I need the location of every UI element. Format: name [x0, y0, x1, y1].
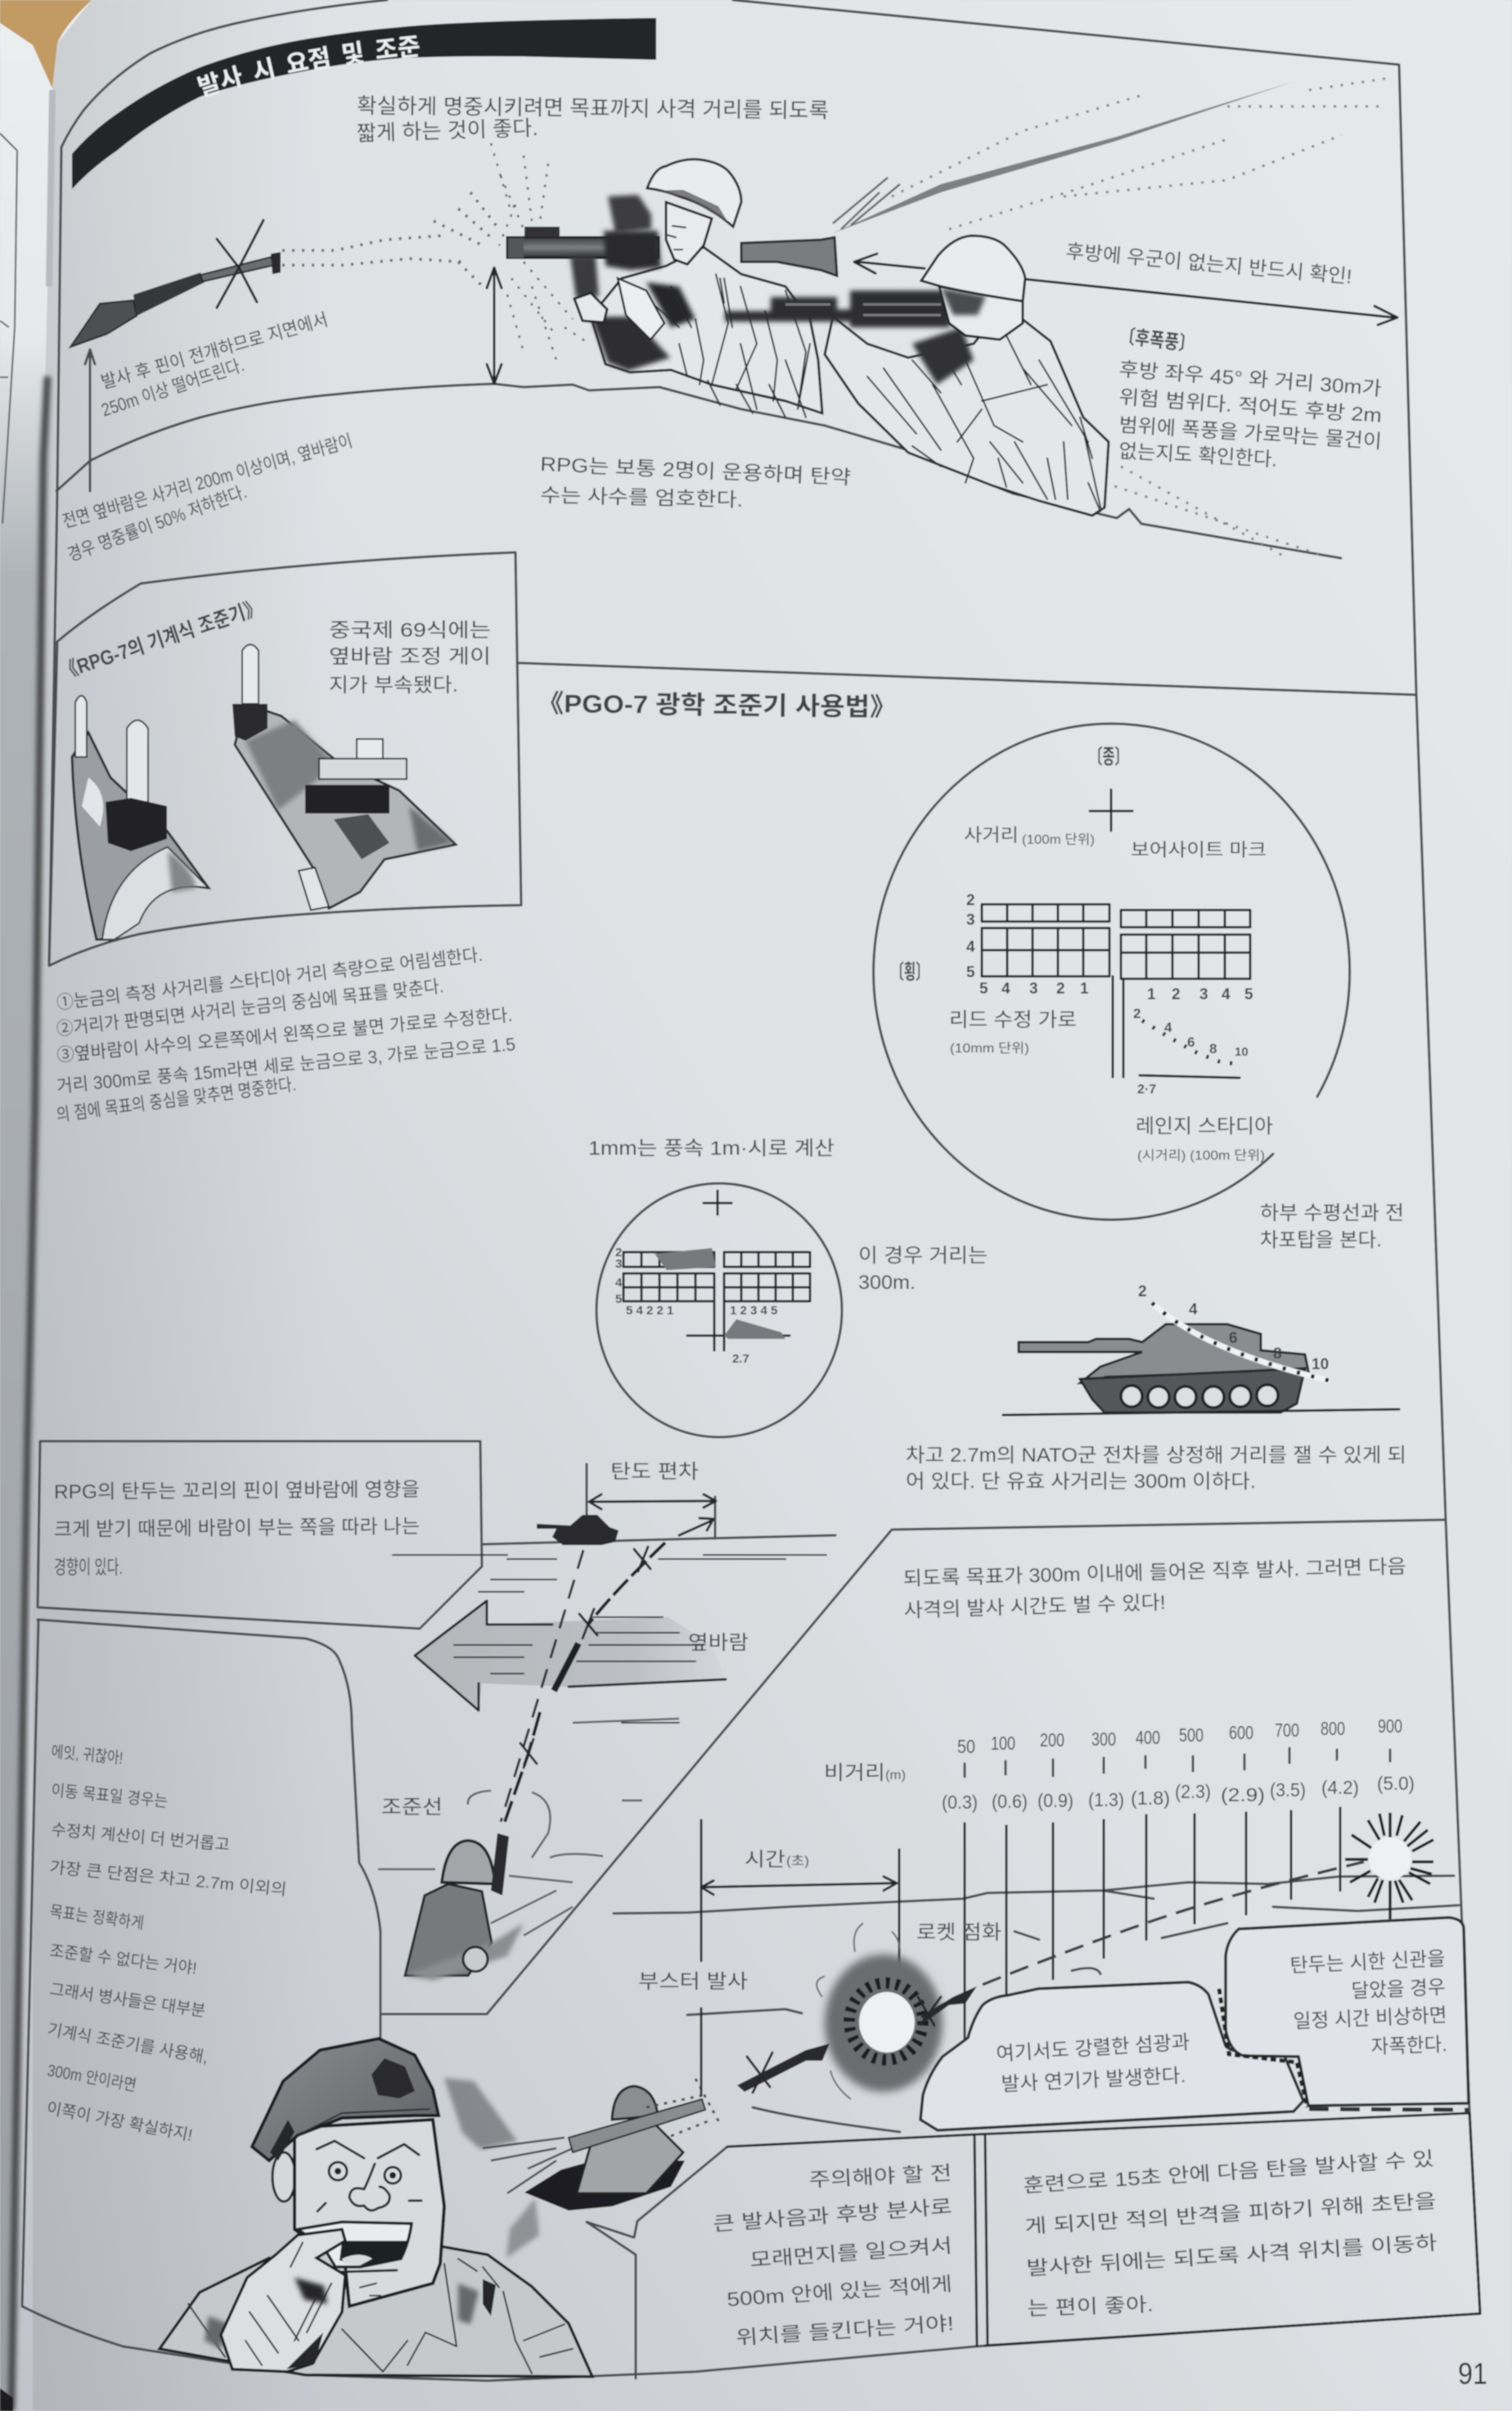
callout: flash at booster: 발사 연기가 발생한다.: [1001, 2065, 1186, 2096]
rear tube: [741, 237, 837, 276]
illustration: tank with stadia: 2: [1138, 1283, 1147, 1300]
chart: ballistic deviation scene: [378, 1461, 835, 1981]
launcher forward section: [507, 237, 659, 258]
callout: time fuze: 달았을 경우: [1351, 1976, 1446, 2003]
beret: [252, 2039, 439, 2161]
ground line of top scene: [56, 384, 1341, 558]
text: sighting steps: ②거리가 판명되면 사거리 눈금의 중심에 목표를 맞춘다.: [56, 976, 445, 1039]
flight times: (0.6): [992, 1791, 1028, 1812]
distance labels: 300: [1091, 1728, 1116, 1750]
label: boresight mark: 보어사이트 마크: [1131, 840, 1267, 860]
left page shadow on the sheet: [33, 0, 327, 2411]
callout: time fuze: 탄두는 시한 신관을: [1289, 1948, 1446, 1977]
callout: time fuze: 자폭한다.: [1370, 2034, 1447, 2058]
reticle numbers: 5: [1244, 986, 1253, 1003]
text: Type 69 note: 지가 부속됐다.: [329, 674, 458, 696]
icon: target tank: [537, 1515, 619, 1545]
reload rocket: [725, 291, 950, 327]
terrain lines: [614, 1876, 1459, 2132]
illustration: sergeant in beret: [160, 2039, 592, 2377]
frame: dispersion scene and distance scene border: [380, 1520, 1446, 2014]
panel: crosswind note: [38, 1441, 482, 1629]
flight times: (3.5): [1270, 1779, 1306, 1800]
panel: training note: 게 되지만 적의 반격을 피하기 위해 초탄을: [1024, 2190, 1437, 2238]
text: sighting steps: ①눈금의 측정 사거리를 스타디아 거리 측량으로 어림셈한다.: [56, 944, 484, 1013]
text: sergeant's explanation: 에잇, 귀찮아!: [51, 1742, 124, 1768]
text: fins open, drop from ground: [99, 309, 331, 421]
text: 2.7m tank assumption: 차고 2.7m의 NATO군 전차를 상정해 거리를 잴 수 있게 되: [906, 1444, 1406, 1467]
label: range stadia: 레인지 스타디아: [1136, 1115, 1273, 1138]
reticle numbers: 4: [966, 939, 975, 956]
label: range: (100m 단위): [1022, 832, 1095, 847]
label: range: 사거리: [964, 825, 1019, 845]
panel: training note: 는 편이 좋아.: [1027, 2294, 1154, 2320]
reticle numbers: 2: [966, 892, 975, 909]
chart: small reticle with tank: 5 4 2 2 1: [626, 1304, 673, 1318]
target tank in reticle: [655, 1248, 785, 1339]
callout: time fuze: [1219, 1918, 1469, 2110]
label: time: 시간: [745, 1849, 785, 1871]
text: distance is 300m: 이 경우 거리는: [858, 1245, 988, 1267]
label: elevation: 〔종〕: [1089, 746, 1128, 768]
back-blast lines: [833, 78, 1391, 557]
text: fins open, drop from ground: 250m 이상 떨어뜨린다.: [99, 354, 246, 421]
illustration: tank with stadia: 10: [1312, 1356, 1329, 1373]
text: sergeant's explanation: 이동 목표일 경우는: [51, 1781, 169, 1811]
distance labels: 600: [1229, 1722, 1253, 1743]
flight times: (0.9): [1037, 1790, 1073, 1811]
text: look at horizon and turret: 하부 수평선과 전: [1260, 1202, 1404, 1224]
distance ticks: [965, 1748, 1390, 1777]
label: range: [964, 825, 1095, 847]
icon: rocket igniting: [918, 1986, 977, 2026]
speech bubble: caution: 주의해야 할 전: [808, 2162, 952, 2192]
flight times: (5.0): [1377, 1773, 1415, 1794]
panel: crosswind note: RPG의 탄두는 꼬리의 핀이 옆바람에 영향을: [54, 1479, 420, 1503]
illustration: firing soldier with RPG-7: [507, 160, 837, 417]
speech bubble: caution: 모래먼지를 일으켜서: [749, 2235, 953, 2272]
aiming line: [501, 1550, 583, 1822]
label: lead correction: (10mm 단위): [950, 1041, 1029, 1056]
text: sergeant's explanation: [45, 1742, 287, 2145]
icon: rocket ignition blast: [817, 1923, 943, 2099]
text: back-blast note: 위험 범위다. 적어도 후방 2m: [1118, 386, 1383, 427]
helmet: [921, 236, 1025, 301]
chart: small reticle with tank: 3: [615, 1257, 622, 1271]
reticle numbers: 4: [1001, 980, 1010, 998]
text: sergeant's explanation: 가장 큰 단점은 차고 2.7m 이외의: [49, 1858, 287, 1900]
reticle numbers: 3: [1029, 980, 1038, 998]
label: ballistic deviation: 탄도 편차: [610, 1461, 699, 1483]
panel: training note: 발사한 뒤에는 되도록 사격 위치를 이동하: [1026, 2232, 1438, 2280]
moustache stubs: [317, 2201, 421, 2211]
text: fire right after 300m: 사격의 발사 시간도 벌 수 있다!: [903, 1592, 1166, 1622]
chart: large PGO-7 reticle: [874, 723, 1350, 1219]
arrow: crosswind direction: [415, 1601, 726, 1710]
text: sergeant's explanation: 300m 안이라면: [46, 2061, 137, 2095]
text: crosswind accuracy note: [61, 430, 354, 566]
icon: left rear sight view: [72, 696, 209, 940]
distance labels: 50: [957, 1736, 975, 1757]
heading: firing essentials: 발사 시 요점 및 조준: [196, 34, 421, 97]
text: wind speed calc: 1mm는 풍속 1m·시로 계산: [588, 1138, 835, 1160]
text: check rear: 후방에 우군이 없는지 반드시 확인!: [1064, 241, 1352, 288]
panel: crosswind note: 크게 받기 때문에 바람이 부는 쪽을 따라 나는: [54, 1516, 420, 1541]
label: time: (초): [786, 1854, 809, 1868]
panel: training note: 훈련으로 15초 안에 다음 탄을 발사할 수 있: [1023, 2148, 1434, 2197]
text: back-blast note: [1118, 325, 1383, 471]
illustration: tank with stadia: 4: [1189, 1301, 1198, 1318]
distance lines: [965, 1808, 1340, 2039]
label: range: [824, 1762, 906, 1784]
reticle numbers: 4: [1222, 986, 1231, 1003]
speech bubble: caution: 위치를 들킨다는 거야!: [736, 2313, 955, 2350]
arrow: check rear is clear: [854, 254, 1397, 325]
text: back-blast note: 〔후폭풍〕: [1118, 325, 1196, 356]
label: line of sight: 조준선: [381, 1796, 443, 1818]
label: rocket ignition: 로켓 점화: [916, 1922, 1001, 1944]
distance labels: 700: [1275, 1719, 1299, 1741]
helmet: [647, 160, 741, 227]
flight times: [942, 1773, 1415, 1813]
heading: PGO-7 usage: 《PGO-7 광학 조준기 사용법》: [537, 689, 897, 722]
reticle numbers: 5: [966, 964, 975, 981]
mouth: [298, 2222, 412, 2267]
distance labels: 400: [1136, 1727, 1160, 1748]
text: two-man crew note: RPG는 보통 2명이 운용하며 탄약: [540, 453, 852, 489]
text: distance is 300m: [858, 1245, 988, 1294]
reticle numbers: 2: [1133, 1006, 1141, 1021]
reticle numbers: 1: [1147, 986, 1156, 1003]
reticle numbers: 2: [1056, 980, 1065, 998]
reticle numbers: 2: [1172, 986, 1181, 1003]
illustration: tank with stadia: 6: [1229, 1330, 1238, 1347]
flight times: (1.8): [1131, 1787, 1170, 1809]
label: windage: 〔횡〕: [891, 961, 929, 984]
text: 2.7m tank assumption: 어 있다. 단 유효 사거리는 300m 이하다.: [906, 1471, 1256, 1493]
face: [295, 2120, 444, 2306]
time span markers and arrow: [701, 1820, 899, 2095]
heading: mechanical sights: 《RPG-7의 기계식 조준기》: [57, 596, 265, 684]
panel: RPG-7 mechanical sights: [49, 552, 521, 966]
text: two-man crew note: [540, 453, 852, 511]
label: range stadia: [1136, 1115, 1273, 1163]
label: range stadia: (시거리) (100m 단위): [1137, 1148, 1265, 1163]
text: sighting steps: 거리 300m로 풍속 15m라면 세로 눈금으로 3, 가로 눈금으로 1.5: [56, 1034, 516, 1097]
reticle numbers: 10: [1235, 1045, 1249, 1059]
icon: RPG rocket in flight: [70, 192, 499, 347]
chart: small reticle with tank: 1 2 3 4 5: [730, 1304, 777, 1318]
header band: [71, 17, 657, 190]
text: sighting steps: 의 점에 목표의 중심을 맞추면 명중한다.: [55, 1074, 297, 1125]
text: two-man crew note: 수는 사수를 엄호한다.: [540, 484, 743, 511]
distance labels: [957, 1715, 1402, 1757]
icon: soldier firing from trench: [378, 1719, 679, 1981]
text: sergeant's explanation: 그래서 병사들은 대부분: [48, 1980, 207, 2021]
chart: small reticle with tank: 5: [615, 1292, 622, 1306]
divider line above PGO-7 section: [517, 663, 1416, 695]
text: fire right after 300m: 되도록 목표가 300m 이내에 들어온 직후 발사. 그러면 다음: [902, 1556, 1406, 1590]
muzzle blast specks: [491, 143, 589, 360]
text: crosswind accuracy note: 경우 명중률이 50% 저하한다.: [65, 481, 250, 566]
flight times: (4.2): [1321, 1777, 1359, 1798]
text: distance is 300m: 300m.: [858, 1272, 916, 1294]
text: 2.7m tank assumption: [906, 1444, 1406, 1493]
text: crosswind accuracy note: 전면 옆바람은 사거리 200m 이상이며, 옆바람이: [61, 430, 354, 532]
text: shoot closer for a sure hit: 확실하게 명중시키려면 목표까지 사격 거리를 되도록: [357, 93, 829, 123]
label: time: [745, 1849, 809, 1871]
hand: [221, 2229, 345, 2372]
chart: small reticle with tank: 2: [615, 1246, 622, 1260]
text: look at horizon and turret: [1260, 1202, 1404, 1251]
callout: time fuze: 일정 시간 비상하면: [1293, 2004, 1447, 2033]
flight times: (1.3): [1088, 1789, 1124, 1810]
text: sergeant's explanation: 기계식 조준기를 사용해,: [46, 2020, 209, 2067]
text: sighting steps: [55, 944, 516, 1125]
text: sergeant's explanation: 이쪽이 가장 확실하지!: [45, 2098, 194, 2145]
speech balloon: sergeant: [38, 1620, 380, 2145]
distance labels: 200: [1040, 1729, 1064, 1751]
callout: flash at booster: 여기서도 강렬한 섬광과: [996, 2031, 1190, 2066]
panel: crosswind note: 경향이 있다.: [54, 1557, 123, 1579]
chart: small reticle with tank: [596, 1183, 842, 1437]
label: crosswind: 옆바람: [688, 1632, 749, 1654]
speech bubble: caution: 큰 발사음과 후방 분사로: [712, 2196, 953, 2236]
page number: 91: [1458, 2357, 1487, 2391]
arrow: height above ground: [487, 268, 502, 384]
distance labels: 900: [1378, 1715, 1402, 1737]
icon: right Type 69 sight view: [232, 645, 456, 910]
text: Type 69 note: [329, 620, 491, 696]
panel: training note: [727, 2113, 1480, 2346]
text: Type 69 note: 중국제 69식에는: [329, 620, 491, 642]
text: sergeant's explanation: 목표는 정확하게: [48, 1902, 145, 1933]
distance labels: 500: [1179, 1724, 1204, 1746]
shoulders and uniform: [160, 2247, 592, 2377]
distance labels: 800: [1321, 1718, 1345, 1739]
reticle numbers: 3: [1199, 986, 1208, 1003]
text: sergeant's explanation: 조준할 수 없다는 거야!: [48, 1941, 198, 1978]
text: sergeant's explanation: 수정치 계산이 더 번거롭고: [51, 1820, 231, 1854]
label: range: 비거리: [824, 1762, 885, 1784]
reticle numbers: 5: [979, 980, 988, 998]
loader body: [825, 305, 1109, 516]
illustration: tank with stadia: 8: [1273, 1345, 1282, 1363]
callout: flash at booster: [920, 1982, 1303, 2130]
speech bubble: caution: 500m 안에 있는 적에게: [727, 2274, 953, 2311]
text: back-blast note: 후방 좌우 45° 와 거리 30m가: [1118, 358, 1383, 400]
icon: rocket after booster: [737, 2044, 830, 2093]
text: shoot closer for a sure hit: 짧게 하는 것이 좋다.: [356, 115, 538, 146]
nose: [349, 2164, 389, 2210]
distance labels: 100: [991, 1733, 1015, 1754]
reticle numbers: [966, 892, 1253, 1097]
flight times: (0.3): [942, 1791, 978, 1813]
soldier body: [591, 247, 822, 413]
beret badge: [371, 2058, 415, 2098]
label: lead correction: [949, 1009, 1077, 1056]
text: back-blast note: 범위에 폭풍을 가로막는 물건이: [1118, 414, 1383, 453]
icon: self-destruct starburst: [1345, 1813, 1433, 1919]
arrow: deviation span: [589, 1494, 716, 1535]
reticle numbers: 2·7: [1137, 1083, 1156, 1097]
label: booster launch: 부스터 발사: [638, 1971, 748, 1993]
face: [666, 202, 712, 264]
illustration: tank with stadia: [1003, 1283, 1399, 1415]
icon: boresight cross: [1090, 790, 1132, 831]
speech bubble: caution: [587, 2147, 955, 2378]
face: [939, 286, 1023, 340]
ear: [272, 2152, 295, 2201]
reticle grid: [982, 904, 1250, 1078]
text: fins open, drop from ground: 발사 후 핀이 전개하므로 지면에서: [99, 309, 331, 393]
reticle numbers: 3: [966, 912, 975, 929]
reticle numbers: 1: [1080, 980, 1089, 998]
left facing page and gutter: [0, 0, 92, 2411]
text: shoot closer for a sure hit: [356, 93, 829, 146]
rocket trajectory: [505, 1543, 665, 1822]
flight times: (2.9): [1221, 1784, 1265, 1805]
text: back-blast note: 없는지도 확인한다.: [1118, 440, 1278, 471]
text: fire right after 300m: [902, 1556, 1406, 1622]
label: range: (m): [885, 1769, 906, 1782]
arrow: fall height on left: [85, 349, 95, 491]
reticle numbers: 6: [1187, 1034, 1195, 1050]
chart: small reticle with tank: 2.7: [732, 1352, 749, 1366]
chart: range and flight-time scale: [614, 1715, 1459, 2132]
illustration: soldier in foxhole with backblast: [444, 2078, 720, 2258]
reticle numbers: 8: [1209, 1041, 1217, 1057]
label: lead correction: 리드 수정 가로: [949, 1009, 1077, 1031]
reticle numbers: 4: [1164, 1020, 1172, 1035]
text: look at horizon and turret: 차포탑을 본다.: [1260, 1229, 1382, 1251]
text: Type 69 note: 옆바람 조정 게이: [329, 646, 491, 668]
dashed trajectory: [983, 1862, 1364, 1985]
flight times: (2.3): [1175, 1781, 1211, 1802]
chart: small reticle with tank: 4: [615, 1276, 623, 1290]
text: sighting steps: ③옆바람이 사수의 오른쪽에서 왼쪽으로 불면 가로로 수정한다.: [56, 1004, 513, 1066]
eyes and brows: [317, 2141, 419, 2183]
illustration: loader with reload round: [725, 236, 1109, 516]
